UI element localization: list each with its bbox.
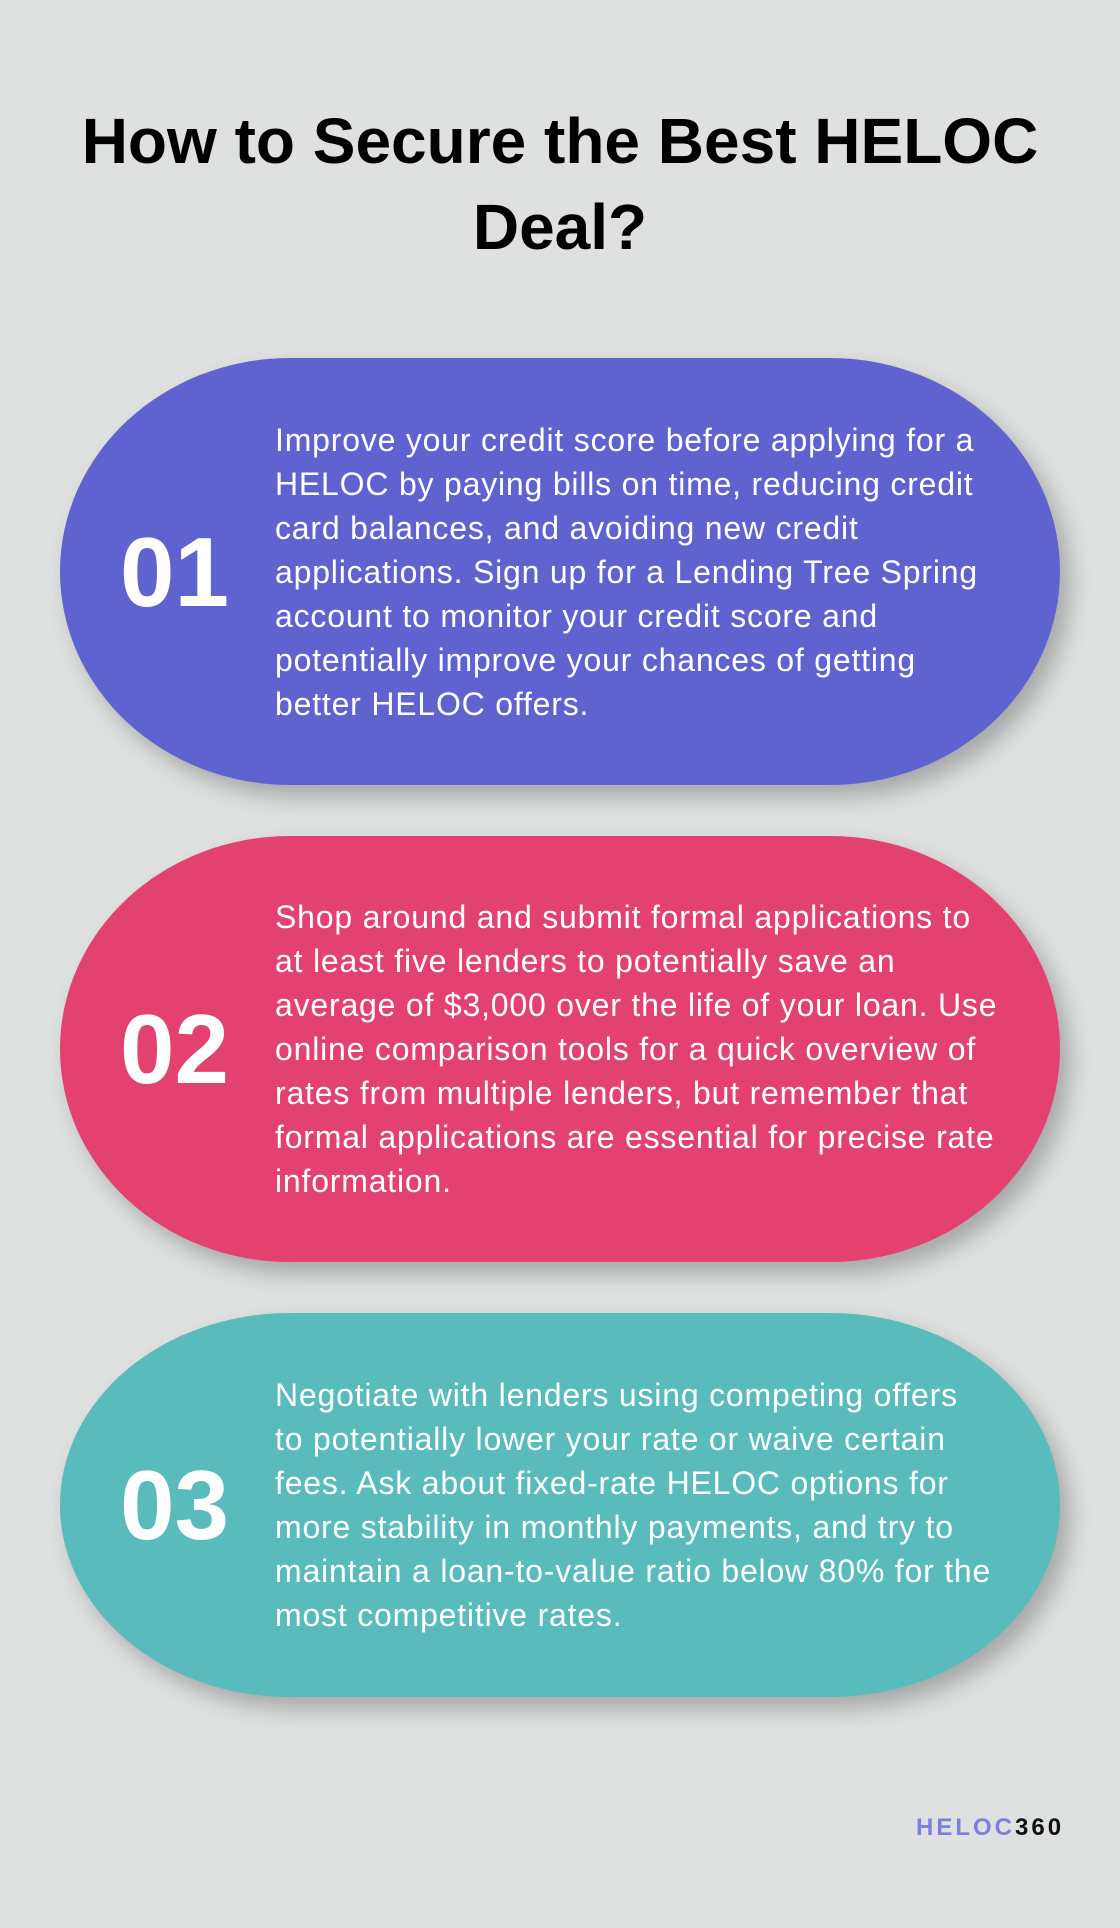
text: step 03: fees. Ask about fixed-rate HELOC options for bbox=[275, 1465, 949, 1501]
text: step 03: most competitive rates. bbox=[275, 1597, 622, 1633]
text: step 02: Shop around and submit formal applications to bbox=[275, 899, 971, 935]
text: step 02: information. bbox=[275, 1163, 452, 1199]
panel: step 03 bbox=[60, 1313, 1060, 1697]
panel: step 02 bbox=[60, 836, 1060, 1262]
text: step 02: at least five lenders to potentially save an bbox=[275, 943, 895, 979]
text: step 01: card balances, and avoiding new credit bbox=[275, 510, 859, 546]
panel: step 01 bbox=[60, 358, 1060, 785]
number 03: 03 bbox=[120, 1450, 229, 1560]
text: step 01 bbox=[275, 422, 978, 722]
text: step 02: average of $3,000 over the life of your loan. Use bbox=[275, 987, 997, 1023]
title: Deal? bbox=[473, 191, 647, 263]
text: step 01: HELOC by paying bills on time, reducing credit bbox=[275, 466, 973, 502]
text: step 02 bbox=[275, 899, 997, 1199]
title: How to Secure the Best HELOC bbox=[82, 105, 1038, 177]
text: step 02: online comparison tools for a quick overview of bbox=[275, 1031, 976, 1067]
text: step 03: maintain a loan-to-value ratio below 80% for the bbox=[275, 1553, 991, 1589]
text: step 01: better HELOC offers. bbox=[275, 686, 589, 722]
number 01: 01 bbox=[120, 516, 229, 626]
logo: HELOC360 bbox=[916, 1814, 1064, 1841]
text: step 01: account to monitor your credit score and bbox=[275, 598, 878, 634]
text: step 03: to potentially lower your rate or waive certain bbox=[275, 1421, 946, 1457]
text: step 02: formal applications are essential for precise rate bbox=[275, 1119, 994, 1155]
text: step 03: more stability in monthly payments, and try to bbox=[275, 1509, 954, 1545]
text: step 01: applications. Sign up for a Lending Tree Spring bbox=[275, 554, 978, 590]
text: step 03: Negotiate with lenders using competing offers bbox=[275, 1377, 958, 1413]
text: step 01: Improve your credit score before applying for a bbox=[275, 422, 974, 458]
text: step 01: potentially improve your chances of getting bbox=[275, 642, 916, 678]
text: step 02: rates from multiple lenders, but remember that bbox=[275, 1075, 968, 1111]
title bbox=[82, 105, 1038, 263]
number 02: 02 bbox=[120, 994, 229, 1104]
text: step 03 bbox=[275, 1377, 991, 1633]
